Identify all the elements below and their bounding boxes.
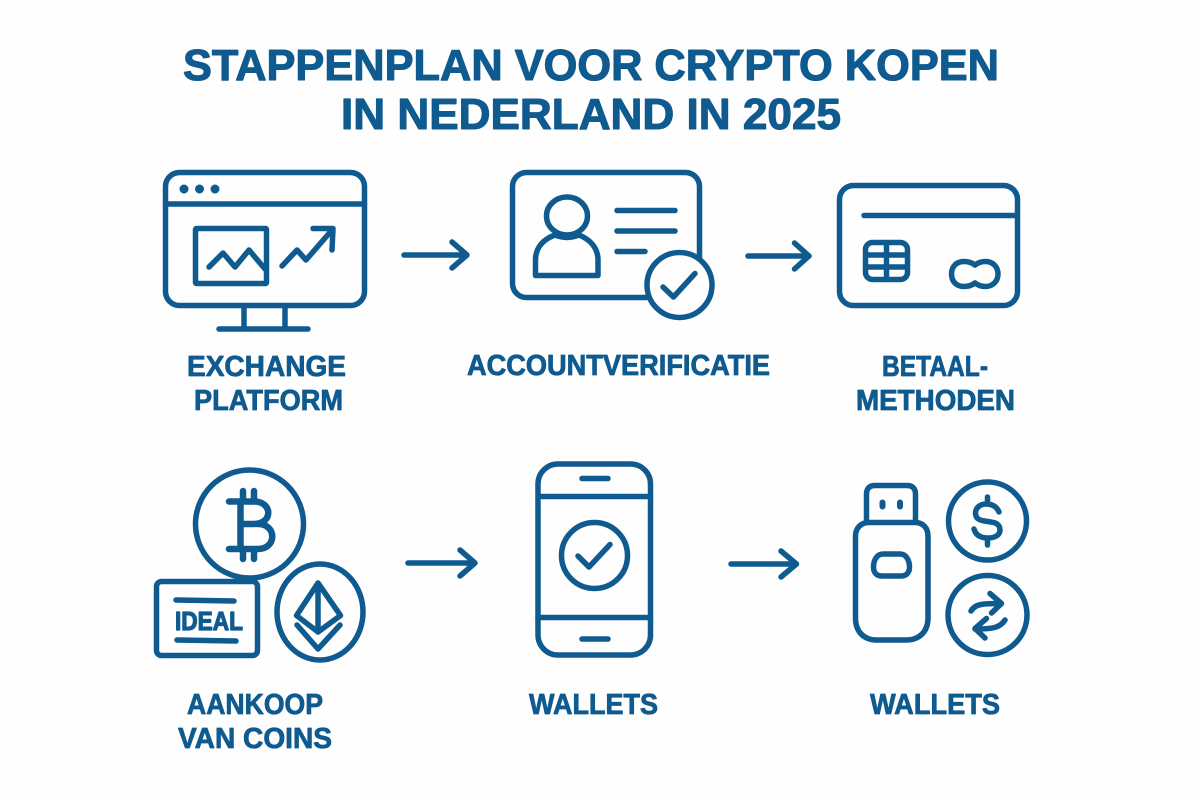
label: aankoop van coins xyxy=(178,689,332,755)
arrow: step 5 to 6 xyxy=(731,551,796,577)
label: wallets: WALLETS xyxy=(529,689,658,721)
label: betaalmethoden: METHODEN xyxy=(856,385,1015,417)
icon: smartphone wallet xyxy=(538,464,650,655)
title: STAPPENPLAN VOOR CRYPTO KOPEN xyxy=(183,41,999,90)
icon: verified ID card xyxy=(512,172,712,318)
title xyxy=(183,41,999,139)
icon: coins and iDEAL xyxy=(156,470,363,660)
icon: exchange platform monitor xyxy=(166,172,364,329)
arrow: step 4 to 5 xyxy=(408,550,475,576)
label: exchange platform: EXCHANGE xyxy=(187,351,346,383)
icon: coins and iDEAL: IDEAL xyxy=(175,606,243,636)
label: exchange platform: PLATFORM xyxy=(194,385,343,417)
icon: payment card xyxy=(840,186,1018,306)
label: aankoop van coins: VAN COINS xyxy=(178,723,332,755)
label: accountverificatie: ACCOUNTVERIFICATIE xyxy=(467,350,770,382)
title: IN NEDERLAND IN 2025 xyxy=(341,90,841,139)
label: aankoop van coins: AANKOOP xyxy=(187,689,323,721)
label: exchange platform xyxy=(187,351,346,417)
icon: hardware wallet and coins xyxy=(856,482,1027,654)
label: wallets hardware: WALLETS xyxy=(870,689,1000,721)
label: betaalmethoden xyxy=(856,351,1015,417)
arrow: step 2 to 3 xyxy=(748,243,809,269)
arrow: step 1 to 2 xyxy=(404,242,467,268)
label: betaalmethoden: BETAAL- xyxy=(882,351,988,383)
